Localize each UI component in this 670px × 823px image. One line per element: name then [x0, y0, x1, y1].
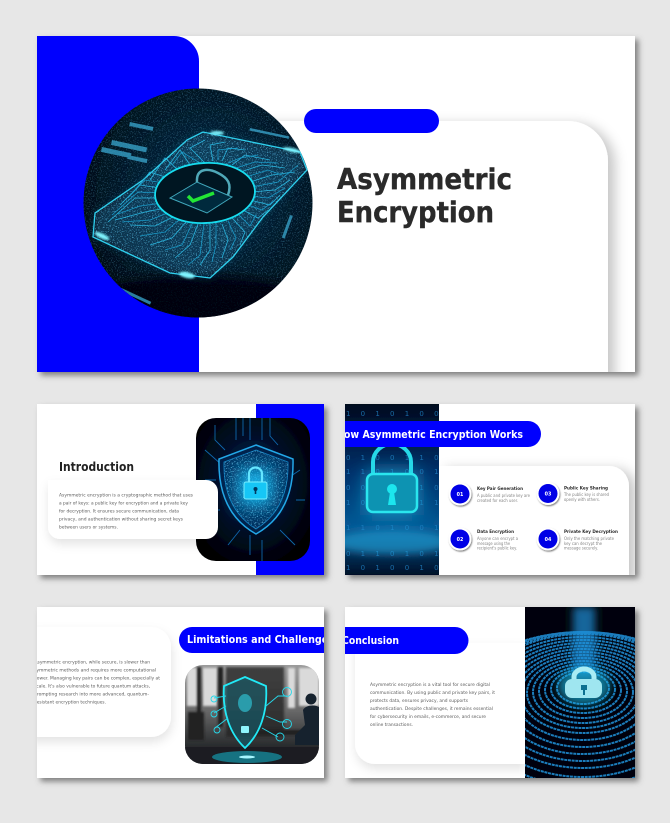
step 04: message securely.: [564, 546, 598, 550]
paragraph: [370, 682, 495, 728]
image: holographic shield in an office: [185, 665, 319, 764]
paragraph: between users or systems.: [59, 524, 118, 530]
step 04: 04: [545, 537, 552, 543]
content card: [439, 466, 629, 580]
image: padlock with binary rain: 1 1 0 1 0 0 1 0 1: [346, 468, 472, 476]
image: padlock with binary rain: 1 1 0 1 0 0 1 0 1: [346, 524, 472, 532]
text card: [355, 643, 525, 764]
step 03: Public Key Sharing: [564, 486, 608, 492]
title: Encryption: [337, 196, 494, 229]
circular image: padlock on circuit board: [84, 88, 312, 318]
step 01: Key Pair Generation: [477, 486, 523, 492]
paragraph: resistant encryption techniques.: [35, 700, 106, 706]
paragraph: Asymmetric encryption, while secure, is slower than: [34, 660, 150, 666]
step 01: A public and private key are: [477, 493, 530, 498]
step 03: [536, 482, 609, 505]
image: padlock with binary rain: 1 0 0 1 0 1 1 0 0: [346, 499, 472, 507]
slide 4: limitations and challenges: [30, 607, 334, 778]
green check mark: [188, 193, 214, 201]
paragraph: Asymmetric encryption is a vital tool for secure digital: [370, 682, 490, 688]
paragraph: for cybersecurity in emails, e-commerce, and secure: [370, 714, 486, 720]
paragraph: privacy, and authentication without sharing secret keys: [59, 516, 184, 522]
title pill: [336, 421, 541, 447]
title pill: How Asymmetric Encryption Works: [336, 429, 523, 441]
step 03: The public key is shared: [563, 492, 609, 497]
image: padlock over concentric data rings: [525, 607, 635, 778]
paragraph: authentication. Despite challenges, it remains essential: [370, 706, 493, 712]
image: padlock with binary rain: 0 1 0 0 1 1 0 1 0: [346, 454, 472, 462]
blue side band: [256, 404, 324, 575]
slide 2: introduction: [37, 404, 324, 575]
blue side panel: [37, 36, 199, 372]
paragraph: [34, 660, 160, 706]
step 02: message using the: [477, 541, 510, 546]
title pill: [340, 627, 468, 654]
text card: [37, 480, 218, 539]
image: padlock with binary rain: 1 0 1 0 0 1 0 1 1: [346, 564, 472, 572]
step 04: Only the matching private: [564, 536, 615, 541]
image: padlock with binary rain: 0 1 1 0 1 0 1 1 0: [346, 550, 472, 558]
title: Asymmetric: [337, 163, 512, 196]
step 02: Data Encryption: [477, 529, 514, 535]
paragraph: scale. It's also vulnerable to future quantum attacks,: [34, 684, 150, 690]
title pill: Limitations and Challenges: [187, 634, 334, 646]
title pill: Conclusion: [342, 635, 399, 647]
image: padlock with binary rain: 0 0 1 0 1 1 0 0 1: [346, 484, 472, 492]
image: shield with padlock: [196, 418, 310, 561]
person silhouette: [295, 694, 319, 745]
paragraph: a pair of keys: a public key for encryption and a private key: [59, 500, 188, 506]
lock badge: [153, 160, 257, 226]
step 01: created for each user.: [477, 498, 518, 503]
paragraph: [59, 492, 194, 530]
step 03: openly with others.: [564, 497, 600, 502]
paragraph: for decryption. It ensures secure communication, data: [59, 508, 179, 514]
paragraph: communication. By using public and private key pairs, it: [370, 690, 495, 696]
blue pill: [304, 109, 439, 133]
paragraph: online transactions.: [370, 722, 413, 728]
text card: [30, 627, 171, 737]
title: [337, 163, 512, 229]
step 03: 03: [545, 491, 551, 497]
step 01: [448, 482, 530, 506]
step 01: 01: [457, 492, 463, 498]
step 04: [536, 528, 618, 550]
paragraph: protects data, ensures privacy, and supports: [370, 698, 469, 704]
title pill: [179, 627, 334, 653]
paragraph: symmetric methods and requires more computational: [34, 668, 156, 674]
step 02: 02: [457, 537, 463, 543]
image: padlock with binary rain: [345, 404, 439, 575]
image: padlock with binary rain: 1 0 1 0 1 0 0 1 1: [346, 410, 472, 418]
paragraph: power. Managing key pairs can be complex, especially at: [34, 676, 160, 682]
step 02: recipient's public key.: [477, 546, 517, 550]
step 02: [448, 528, 519, 550]
paragraph: prompting research into more advanced, quantum-: [34, 692, 149, 698]
step 02: Anyone can encrypt a: [477, 536, 519, 541]
step 04: key can decrypt the: [564, 541, 603, 546]
slide 3: how it works: [332, 404, 635, 580]
slide 1: title slide: [37, 36, 635, 380]
step 04: Private Key Decryption: [564, 529, 618, 535]
white rounded card: [276, 118, 621, 372]
paragraph: Asymmetric encryption is a cryptographic method that uses: [59, 492, 194, 498]
slide 5: conclusion: [344, 606, 642, 786]
heading: Introduction: [59, 459, 134, 474]
